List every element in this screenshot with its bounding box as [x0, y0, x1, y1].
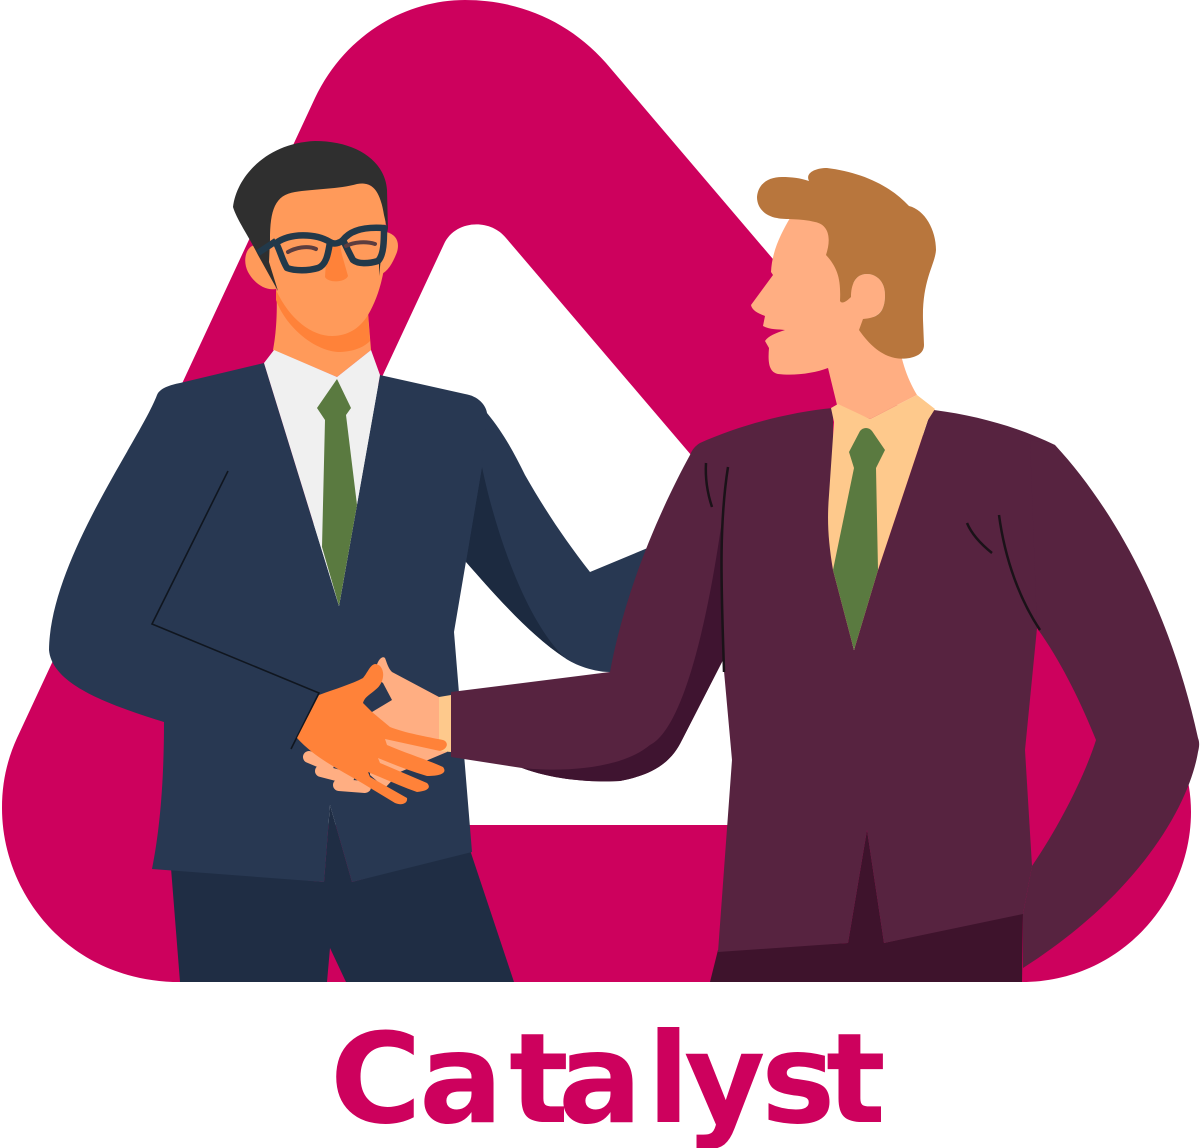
- hair sliver by right ear: [379, 258, 381, 276]
- title: Catalyst: [330, 1007, 886, 1148]
- glasses: [258, 228, 384, 270]
- sleeve fold shadow: [522, 520, 723, 781]
- jacket body and sleeve: [451, 408, 1055, 952]
- figure: man in navy suit: [49, 141, 650, 982]
- handshake: [152, 471, 451, 804]
- hair: [233, 141, 388, 291]
- chin shadow: [276, 290, 370, 352]
- ear right: [379, 232, 398, 275]
- nose: [325, 245, 348, 281]
- tie: [833, 428, 885, 650]
- shirt: [828, 395, 935, 650]
- tie: [317, 379, 357, 606]
- shirt cuff: [439, 695, 451, 752]
- jacket right arm: [1023, 440, 1199, 968]
- ear: [851, 274, 885, 320]
- hair: [757, 168, 936, 359]
- arm shadow: [466, 467, 565, 658]
- figure: man in burgundy suit: [451, 168, 1199, 982]
- shirt: [264, 350, 380, 606]
- sleeve outline of navy jacket: [152, 471, 319, 749]
- eyebrows: [288, 242, 375, 252]
- navy man's hand: [297, 664, 447, 804]
- burgundy man's hand: [370, 657, 447, 788]
- skin fingers behind: [309, 757, 365, 787]
- trousers: [710, 830, 1023, 982]
- jacket creases: [706, 463, 1040, 672]
- jacket: [49, 363, 487, 882]
- trousers: [171, 805, 514, 982]
- neck and face: [751, 218, 917, 419]
- face: [269, 183, 387, 336]
- arm reaching to shoulder: [460, 400, 650, 672]
- ear left: [245, 240, 276, 289]
- neck: [273, 285, 371, 377]
